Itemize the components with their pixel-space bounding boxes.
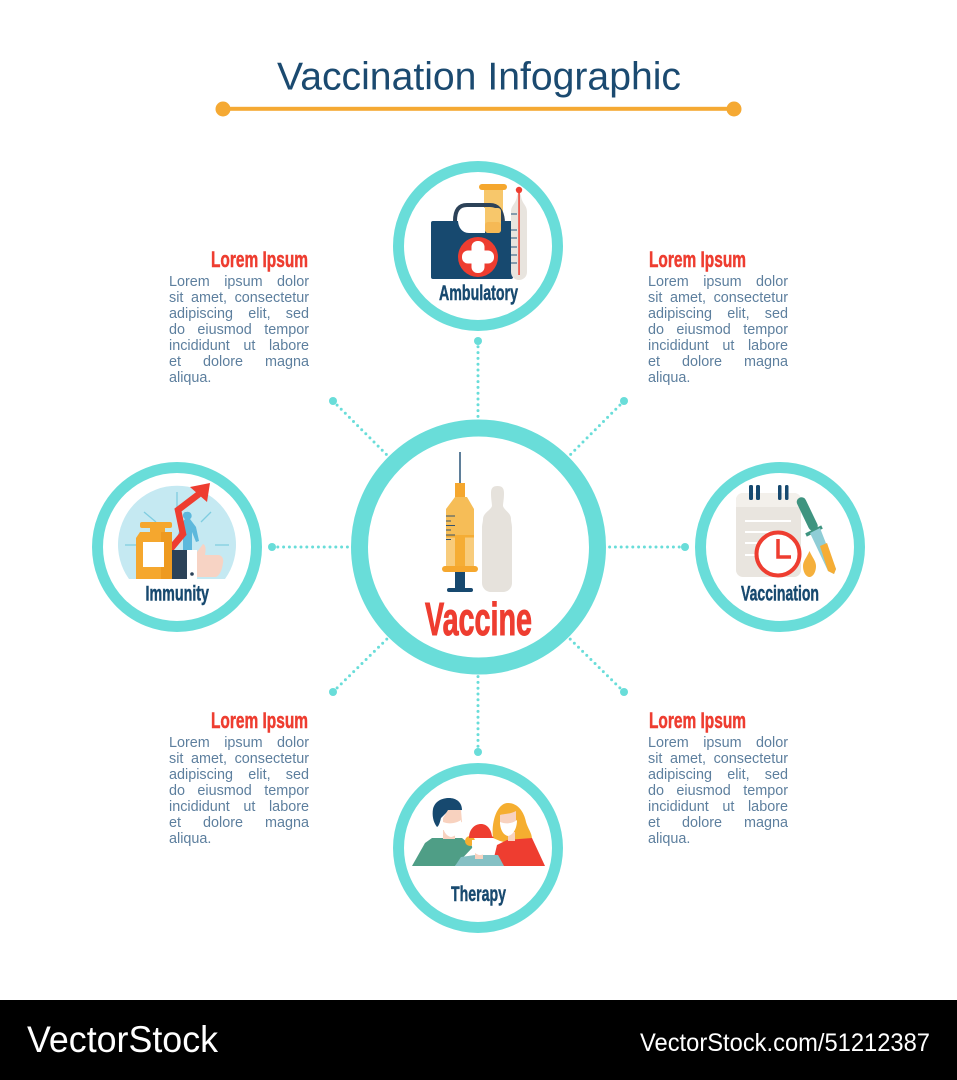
text block: top right: et dolore magna	[648, 354, 788, 370]
text block: top right: do eiusmod tempor	[648, 322, 788, 338]
text block: top left: incididunt ut labore	[169, 338, 309, 354]
panel: ambulatory	[398, 166, 558, 326]
icon: medical bag with thermometer	[431, 184, 527, 280]
heading: top right: Lorem Ipsum	[649, 247, 746, 272]
title underline	[216, 102, 742, 116]
text block: top right: adipiscing elit, sed	[648, 306, 788, 322]
text block: top right: aliqua.	[648, 370, 690, 386]
footer url: VectorStock.com/51212387	[640, 1029, 930, 1057]
woman	[492, 803, 545, 866]
text block: bottom right: aliqua.	[648, 831, 690, 847]
icon: immunity growth	[118, 483, 236, 579]
text block: bottom right: Lorem ipsum dolor	[648, 735, 788, 751]
panel: therapy	[398, 768, 558, 928]
label: Vaccination: Vaccination	[741, 582, 819, 606]
text block: bottom left: incididunt ut labore	[169, 799, 309, 815]
icon: ampoule	[482, 486, 512, 592]
text block: top right: incididunt ut labore	[648, 338, 788, 354]
text block: top left: sit amet, consectetur	[169, 290, 309, 306]
text block: bottom right	[648, 735, 788, 847]
man	[412, 798, 473, 866]
panel: central vaccine	[360, 428, 598, 666]
panel: immunity	[98, 468, 256, 626]
text block: bottom right: do eiusmod tempor	[648, 783, 788, 799]
footer bar	[0, 1000, 957, 1080]
text block: bottom right: adipiscing elit, sed	[648, 767, 788, 783]
label: Therapy: Therapy	[451, 883, 506, 906]
icon: family in masks	[412, 798, 545, 866]
dotted connectors	[268, 337, 689, 756]
text block: top right: sit amet, consectetur	[648, 290, 788, 306]
text block: bottom left: et dolore magna	[169, 815, 309, 831]
text block: top right: Lorem ipsum dolor	[648, 274, 788, 290]
heading: bottom left: Lorem Ipsum	[211, 708, 308, 733]
heading: top left: Lorem Ipsum	[211, 247, 308, 272]
text block: top left	[169, 274, 309, 386]
text block: top left: adipiscing elit, sed	[169, 306, 309, 322]
label: Ambulatory: Ambulatory	[439, 282, 518, 305]
text block: bottom left	[169, 735, 309, 847]
footer brand: VectorStock	[27, 1019, 218, 1060]
label: Immunity: Immunity	[146, 582, 209, 606]
panel: vaccination	[700, 468, 860, 626]
text block: bottom left: do eiusmod tempor	[169, 783, 309, 799]
icon: syringe	[442, 452, 478, 592]
child	[455, 824, 504, 866]
text block: top left: Lorem ipsum dolor	[169, 274, 309, 290]
text block: bottom left: aliqua.	[169, 831, 211, 847]
text block: top left: do eiusmod tempor	[169, 322, 309, 338]
text block: bottom right: sit amet, consectetur	[648, 751, 788, 767]
text block: top left: et dolore magna	[169, 354, 309, 370]
text block: bottom right: et dolore magna	[648, 815, 788, 831]
text block: bottom left: Lorem ipsum dolor	[169, 735, 309, 751]
heading: bottom right: Lorem Ipsum	[649, 708, 746, 733]
text block: bottom left: sit amet, consectetur	[169, 751, 309, 767]
label: Vaccine: Vaccine	[425, 593, 532, 645]
title: Vaccination Infographic	[277, 56, 681, 98]
text block: top left: aliqua.	[169, 370, 211, 386]
text block: top right	[648, 274, 788, 386]
text block: bottom right: incididunt ut labore	[648, 799, 788, 815]
text block: bottom left: adipiscing elit, sed	[169, 767, 309, 783]
icon: notepad, clock and dropper	[736, 485, 836, 577]
